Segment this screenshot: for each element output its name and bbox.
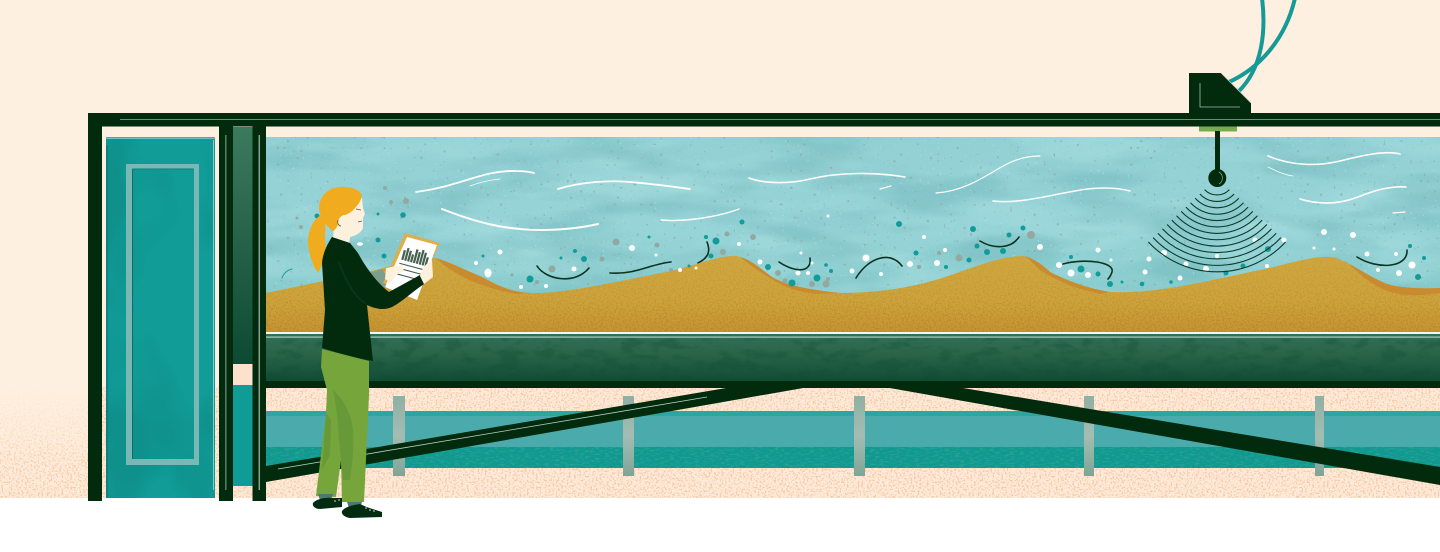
shoes (313, 498, 382, 518)
far hand (385, 265, 404, 283)
clipboard (383, 233, 440, 300)
head and neck (333, 198, 365, 245)
cables (1229, 0, 1295, 92)
diagonal support struts (266, 387, 1440, 485)
entry door (106, 137, 215, 498)
socks (318, 494, 362, 508)
ponytail (308, 215, 326, 273)
white current streaks (416, 153, 1406, 230)
far arm sleeve (370, 269, 391, 290)
ground texture (0, 387, 1440, 498)
sonar beam arcs (1148, 190, 1286, 272)
suspended sediment: white particles (357, 214, 1416, 289)
suspended sediment: teal particles (314, 212, 1426, 287)
orange dune slip faces (436, 256, 1440, 295)
sleeve crease (339, 262, 366, 304)
underfloor pipe (266, 411, 1440, 468)
near hand (420, 260, 433, 284)
upright panel beside door (232, 127, 253, 486)
sand bed (266, 256, 1440, 332)
steel frame (88, 113, 1440, 501)
researcher (308, 187, 440, 518)
jacket and near arm (322, 237, 424, 361)
door inset panel (126, 164, 199, 465)
pipe support posts (393, 396, 1324, 476)
sand grain texture (266, 255, 1440, 333)
black eddy curves (282, 237, 1407, 279)
hair (319, 187, 362, 231)
trousers (316, 349, 369, 502)
sonar sensor mount (1189, 73, 1251, 187)
suspended sediment: grey particles (296, 186, 1035, 288)
shoe studs (334, 499, 375, 512)
water in tank (266, 137, 1440, 307)
trough side wall (266, 332, 1440, 388)
trouser shading (322, 390, 353, 480)
face details (338, 209, 362, 226)
